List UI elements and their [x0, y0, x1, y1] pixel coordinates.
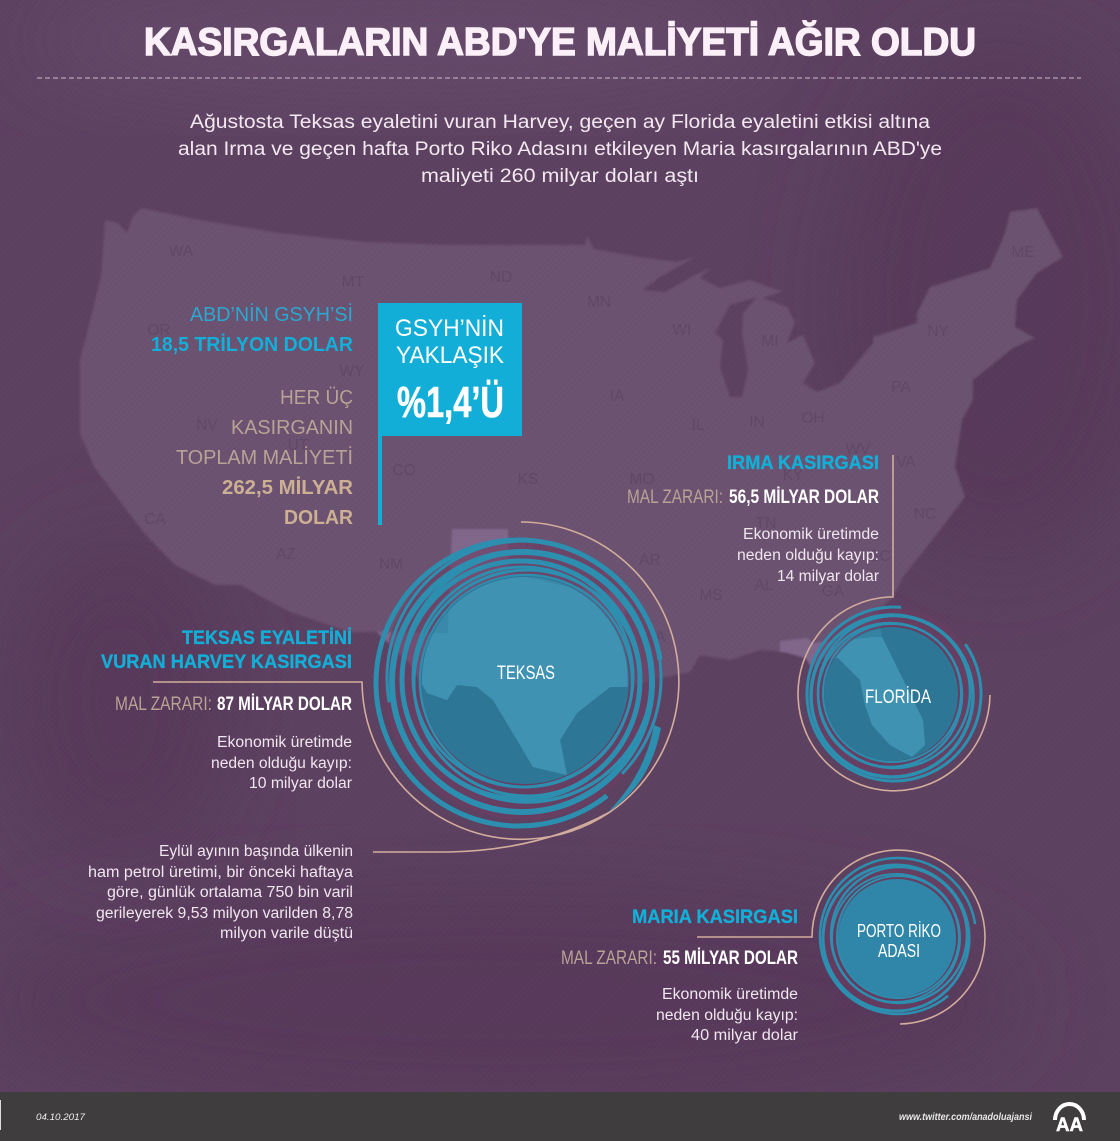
- flag callout: GDP share: %1,4’Ü: [397, 378, 504, 427]
- state abbreviations: IA: [610, 388, 625, 405]
- Harvey text block: [101, 628, 352, 792]
- state abbreviations: MI: [761, 333, 779, 350]
- oil production note text: ham petrol üretimi, bir önceki haftaya: [88, 864, 353, 881]
- GDP text block: DOLAR: [284, 507, 354, 529]
- oil production note text: Eylül ayının başında ülkenin: [159, 843, 353, 860]
- intro text: alan Irma ve geçen hafta Porto Riko Adasını etkileyen Maria kasırgalarının ABD'ye: [178, 139, 942, 160]
- label: Teksas: TEKSAS: [497, 663, 555, 684]
- Harvey text block: MAL ZARARI:: [115, 694, 212, 715]
- hurricane circle: Porto Rico: [788, 826, 1008, 1046]
- state abbreviations: NV: [196, 417, 218, 434]
- state abbreviations: CA: [144, 511, 166, 528]
- GDP text block: KASIRGANIN: [231, 417, 353, 439]
- oil production note text: gerileyerek 9,53 milyon varilden 8,78: [96, 905, 353, 922]
- icon: Anadolu Agency logo: AA: [1056, 1115, 1083, 1136]
- state abbreviations: SC: [869, 548, 891, 565]
- Irma text block: IRMA KASIRGASI: [727, 453, 879, 474]
- hurricane circle: Texas: [374, 538, 663, 828]
- Maria text block: 55 MİLYAR DOLAR: [663, 948, 798, 969]
- GDP text block: 262,5 MİLYAR: [222, 476, 354, 499]
- state abbreviations: UT: [288, 437, 309, 454]
- Harvey text block: 87 MİLYAR DOLAR: [217, 694, 352, 715]
- twitter address: www.twitter.com/anadoluajansi: [899, 1112, 1032, 1123]
- GDP text block: [151, 303, 354, 529]
- Harvey text block: neden olduğu kayıp:: [211, 755, 352, 772]
- state abbreviations: ND: [490, 269, 512, 286]
- Harvey text block: Ekonomik üretimde: [217, 734, 352, 751]
- Harvey text block: VURAN HARVEY KASIRGASI: [101, 652, 352, 673]
- state abbreviations: NY: [927, 323, 949, 340]
- oil production note text: milyon varile düştü: [220, 925, 353, 942]
- state abbreviations: WI: [673, 322, 691, 339]
- state abbreviations: AR: [639, 552, 661, 569]
- label: Florida: FLORİDA: [865, 687, 931, 708]
- map of the United States: [80, 208, 1063, 775]
- inner disk with Texas silhouette: [421, 576, 629, 784]
- inner disk: [838, 879, 956, 997]
- Maria text block: neden olduğu kayıp:: [656, 1007, 798, 1024]
- GDP text block: 18,5 TRİLYON DOLAR: [151, 333, 354, 356]
- Irma text block: [627, 453, 879, 585]
- state abbreviations: MO: [630, 471, 654, 488]
- state abbreviations: OH: [801, 410, 825, 427]
- state abbreviations: AL: [755, 577, 774, 594]
- state abbreviations: VA: [896, 454, 916, 471]
- state abbreviations: IN: [749, 414, 765, 431]
- Maria text block: MAL ZARARI:: [561, 948, 657, 969]
- state abbreviations: CO: [392, 462, 416, 479]
- state abbreviations: PA: [891, 379, 911, 396]
- intro text: maliyeti 260 milyar doları aştı: [421, 166, 699, 187]
- state abbreviations: ME: [1011, 244, 1035, 261]
- label: Porto Rico: [857, 921, 941, 961]
- leader line: oil production note: [373, 812, 610, 852]
- state abbreviations: WY: [340, 363, 364, 380]
- Maria text block: MARIA KASIRGASI: [632, 907, 798, 928]
- Maria text block: [561, 907, 798, 1044]
- state abbreviations: NM: [379, 556, 403, 573]
- hurricane circle: Florida: [806, 606, 982, 782]
- Florida highlight outside the circle: [780, 637, 925, 757]
- intro text: [178, 112, 942, 187]
- GDP text block: TOPLAM MALİYETİ: [176, 446, 353, 469]
- intro text: Ağustosta Teksas eyaletini vuran Harvey, geçen ay Florida eyaletini etkisi altına: [190, 112, 930, 133]
- Irma text block: MAL ZARARI:: [627, 487, 723, 508]
- state abbreviations: GA: [822, 583, 845, 600]
- Irma text block: 56,5 MİLYAR DOLAR: [729, 487, 879, 508]
- date: 04.10.2017: [36, 1112, 86, 1123]
- state abbreviations: WV: [846, 441, 871, 458]
- oil production note text: [88, 843, 353, 942]
- state abbreviations: [144, 243, 1035, 646]
- state abbreviations: WA: [169, 243, 194, 260]
- state abbreviations: KY: [783, 467, 803, 484]
- state abbreviations: MS: [699, 587, 723, 604]
- Texas highlight outside the circle: [377, 529, 627, 775]
- state abbreviations: OK: [526, 538, 549, 555]
- state abbreviations: MT: [342, 274, 365, 291]
- GDP text block: ABD’NİN GSYH’Sİ: [190, 303, 353, 326]
- state abbreviations: TN: [756, 515, 776, 532]
- Maria text block: 40 milyar dolar: [691, 1027, 798, 1044]
- icon: Anadolu Agency logo: [1055, 1104, 1084, 1136]
- flag callout: GDP share: YAKLAŞIK: [396, 342, 504, 369]
- GDP text block: HER ÜÇ: [280, 387, 353, 409]
- oil production note text: göre, günlük ortalama 750 bin varil: [107, 884, 353, 901]
- title: KASIRGALARIN ABD'YE MALİYETİ AĞIR OLDU: [144, 20, 976, 64]
- state abbreviations: LA: [647, 629, 666, 646]
- flag callout: GDP share: GSYH’NİN: [395, 315, 504, 342]
- flag callout: GDP share: [378, 303, 522, 525]
- leader line and ring: Texas: [153, 522, 679, 839]
- state abbreviations: NC: [914, 506, 936, 523]
- leader line and ring: Florida: [798, 455, 990, 791]
- inner disk with Florida silhouette: [824, 627, 958, 761]
- state abbreviations: AZ: [276, 546, 296, 563]
- Maria text block: Ekonomik üretimde: [662, 986, 798, 1003]
- Irma text block: 14 milyar dolar: [777, 568, 879, 585]
- label: Porto Rico: PORTO RİKO: [857, 921, 941, 941]
- state abbreviations: IL: [692, 417, 705, 434]
- Harvey text block: TEKSAS EYALETİNİ: [182, 628, 352, 649]
- state abbreviations: KS: [518, 471, 538, 488]
- Irma text block: neden olduğu kayıp:: [737, 547, 879, 564]
- label: Porto Rico: ADASI: [878, 941, 920, 961]
- Irma text block: Ekonomik üretimde: [743, 526, 879, 543]
- state abbreviations: OR: [147, 322, 171, 339]
- footer: [0, 1092, 1120, 1141]
- state abbreviations: MN: [587, 294, 611, 311]
- Harvey text block: 10 milyar dolar: [249, 775, 352, 792]
- leader line and ring: Porto Rico: [697, 850, 985, 1024]
